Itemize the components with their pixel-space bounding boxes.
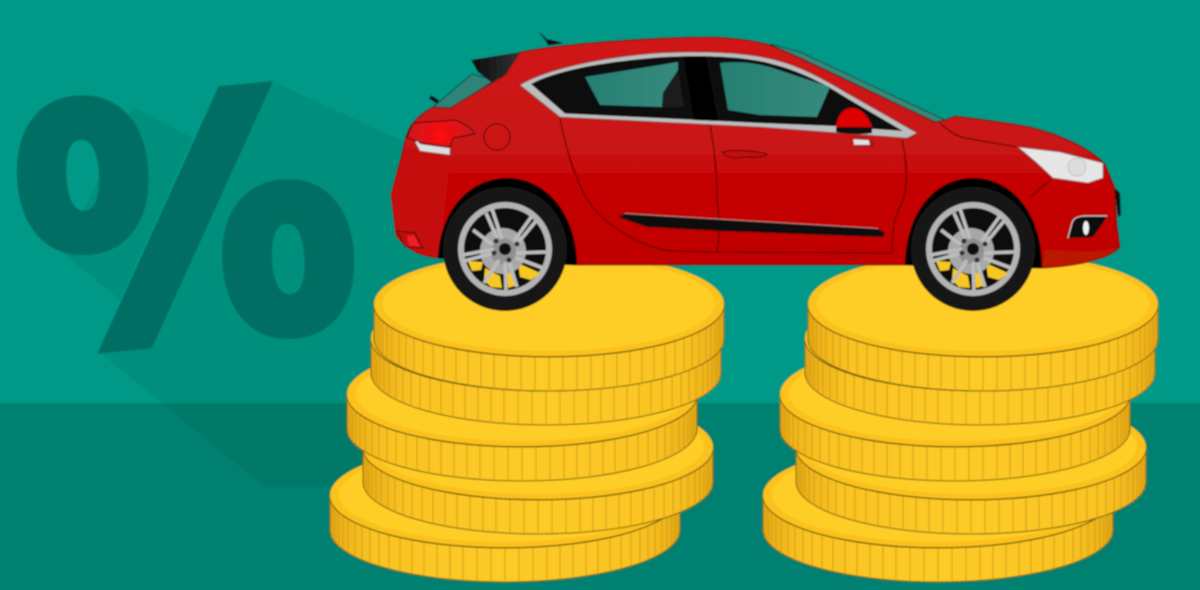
front door glass (720, 62, 830, 117)
red car (391, 33, 1121, 311)
front wheel arch (905, 178, 1042, 268)
front door line (892, 140, 906, 253)
antenna (540, 33, 562, 45)
rear wheel (443, 187, 567, 311)
rear wheel arch (438, 178, 577, 265)
seat silhouette (662, 70, 684, 107)
rear quarter shading (391, 147, 450, 258)
rear door line (560, 118, 892, 253)
front grille edge (1115, 188, 1121, 217)
headlight lens (1068, 158, 1086, 176)
long shadow of percent sign (63, 80, 520, 487)
fog lamp (1068, 216, 1107, 238)
headlight (1018, 147, 1103, 183)
car body (391, 37, 1120, 268)
front wheel (911, 187, 1035, 311)
mirror glass mount (851, 137, 875, 147)
molding highlight (625, 214, 878, 228)
mirror base (836, 127, 872, 134)
tail light chrome (415, 141, 450, 155)
bonnet shut line (940, 123, 1017, 147)
rear window (433, 74, 495, 109)
rear wiper (430, 97, 438, 102)
wing mirror (836, 108, 872, 127)
rear side glass (585, 62, 678, 107)
fuel cap (484, 124, 510, 150)
fender line (1030, 180, 1050, 198)
door split line (710, 125, 720, 252)
wall background (0, 0, 1200, 404)
door handle (722, 151, 767, 158)
dark window opening (531, 56, 903, 131)
side molding (618, 214, 885, 237)
windshield (770, 44, 945, 124)
reflector highlight (407, 235, 420, 247)
tail light (407, 120, 475, 147)
fog lamp bulb (1083, 221, 1089, 235)
door pillar (684, 56, 718, 121)
percent sign: % (6, 22, 335, 464)
mirror arm chrome (853, 139, 870, 145)
front bumper shade (1042, 248, 1118, 268)
coin stack: left (330, 252, 724, 582)
coin stack: right (762, 252, 1158, 582)
rear reflector (397, 231, 423, 248)
fog lamp chrome (1068, 216, 1107, 238)
spoiler (471, 52, 520, 82)
window chrome surround (520, 52, 917, 138)
floor band (0, 403, 1200, 590)
percent sign (16, 81, 355, 354)
